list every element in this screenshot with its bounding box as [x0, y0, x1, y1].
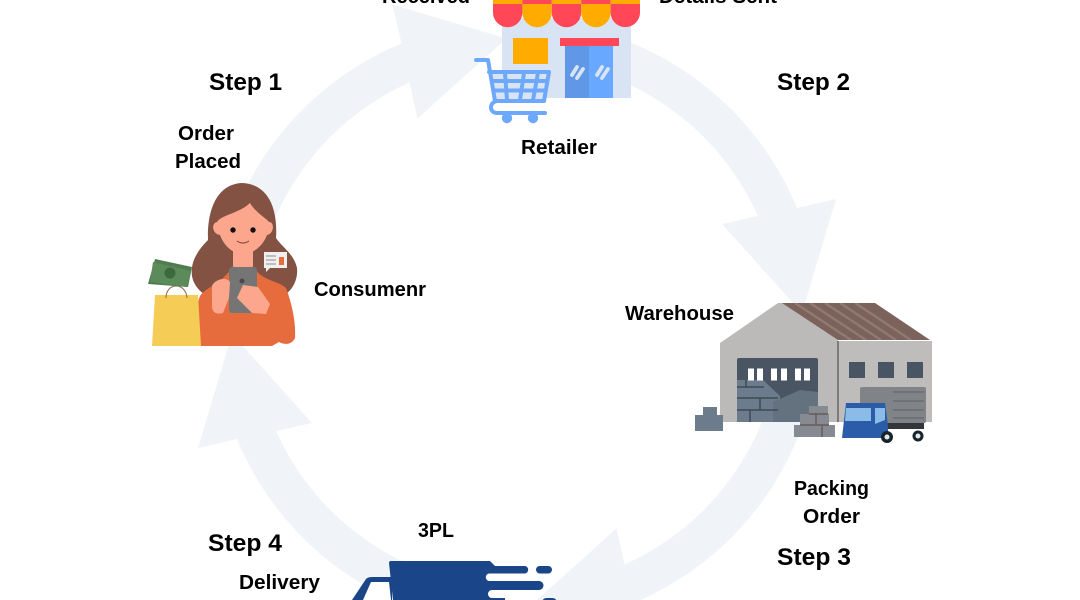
- side windows: [849, 362, 923, 378]
- infographic: supply chain cycle: [148, 0, 932, 600]
- banknotes: [148, 259, 192, 287]
- icon: shopping cart: [476, 60, 549, 123]
- arrow: retailer to warehouse: [585, 31, 836, 313]
- icon: retailer store: [493, 0, 640, 98]
- store awning: [493, 0, 640, 27]
- arrow: consumer to retailer: [224, 4, 507, 255]
- arrow: 3PL to consumer: [198, 334, 449, 600]
- label: Delivery: Delivery: [239, 572, 321, 594]
- label: Packing Order: Packing: [794, 478, 869, 500]
- label: Order Placed: Order: [178, 123, 234, 145]
- heading: Step 2: Step 2: [777, 69, 850, 96]
- label: Warehouse: Warehouse: [625, 303, 734, 325]
- label: Retailer: Retailer: [521, 137, 597, 159]
- label: Packing Order: Order: [803, 506, 860, 528]
- message bubble: [264, 252, 287, 272]
- icon: warehouse with truck: [695, 303, 932, 443]
- neck and face: [233, 248, 253, 280]
- icon: 3PL delivery truck: [352, 561, 556, 600]
- roof: [782, 303, 930, 340]
- boxes: [695, 407, 723, 431]
- phone and hands: [229, 267, 257, 313]
- heading: Step 1: Step 1: [209, 69, 282, 96]
- hair: [192, 183, 297, 294]
- label: Consumenr: Consumenr: [314, 279, 426, 301]
- heading: Step 4: Step 4: [208, 530, 283, 557]
- label: Order Placed: Placed: [175, 151, 241, 173]
- heading: Step 3: Step 3: [777, 544, 851, 571]
- label: Packing Order: [794, 478, 869, 528]
- orange sweater: [196, 266, 295, 346]
- icon: consumer with phone and shopping bag: [148, 183, 297, 346]
- delivery truck: [860, 387, 926, 423]
- warehouse door with bricks: [737, 358, 818, 422]
- label: Order Placed: [175, 123, 241, 173]
- arrow: warehouse to 3PL: [528, 392, 810, 600]
- shopping bag: [152, 295, 201, 346]
- label: 3PL: 3PL: [418, 520, 454, 542]
